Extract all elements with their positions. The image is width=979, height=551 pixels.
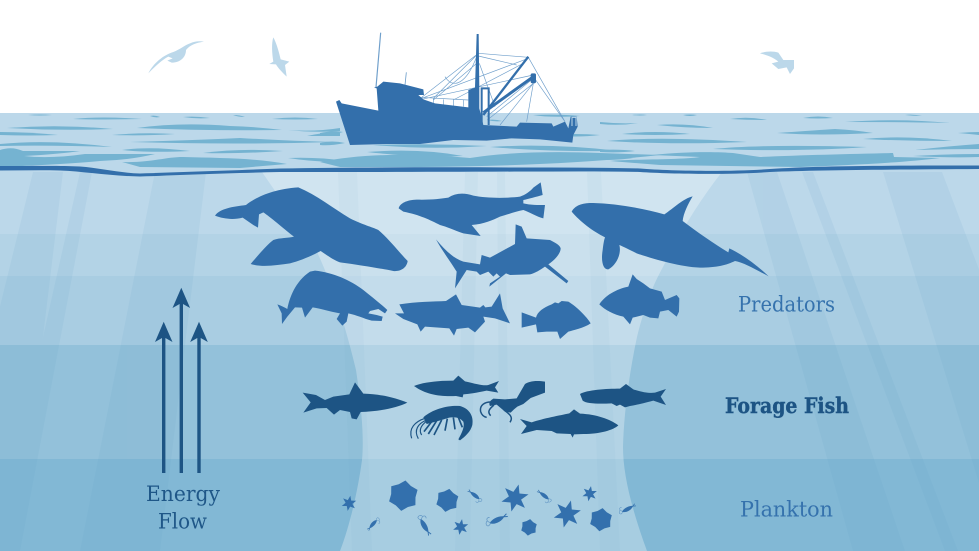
label: energy flow xyxy=(146,482,220,534)
icon: seal xyxy=(399,182,545,236)
arrow right xyxy=(190,322,208,473)
surface ripples xyxy=(0,114,979,168)
icon: seagull middle xyxy=(269,37,289,77)
sea surface xyxy=(0,113,979,176)
icon: billfish xyxy=(436,224,568,288)
fishing boat xyxy=(336,33,578,145)
icon: squid xyxy=(480,381,545,422)
icon: humpback whale xyxy=(215,187,408,271)
hull and cabin xyxy=(336,34,578,145)
label: plankton: Plankton xyxy=(740,498,833,522)
sunlit centre column xyxy=(262,172,722,551)
label: forage fish: Forage Fish xyxy=(725,393,849,418)
icon: salmon xyxy=(395,293,510,336)
icon: copepods xyxy=(366,489,636,536)
forage fish group xyxy=(303,376,666,440)
faint vertical rays in centre xyxy=(338,172,620,551)
icon: phytoplankton cells xyxy=(341,479,613,537)
icon: krill xyxy=(411,406,473,440)
label: predators: Predators xyxy=(738,292,835,316)
icon: forage fish lower xyxy=(520,409,618,438)
icon: seagull left xyxy=(148,41,204,73)
label: energy flow: Energy xyxy=(146,482,220,506)
label: energy flow: Flow xyxy=(158,510,207,534)
icon: seagull right xyxy=(760,51,794,74)
icon: forage fish top xyxy=(414,376,499,397)
icon: rockfish xyxy=(522,301,591,339)
icon: orca xyxy=(572,196,769,276)
icon: carp xyxy=(277,271,387,326)
icon: forage fish right xyxy=(580,384,666,407)
light rays xyxy=(8,172,979,276)
plankton group xyxy=(341,479,636,537)
arrow left xyxy=(155,322,172,473)
ocean depth bands xyxy=(0,172,979,551)
rigging xyxy=(376,33,565,125)
icon: forage fish left xyxy=(303,382,407,419)
energy flow arrows xyxy=(155,288,208,473)
predators group xyxy=(215,182,769,339)
icon: grouper xyxy=(599,274,679,324)
surface line xyxy=(0,166,979,176)
arrow centre xyxy=(172,288,190,473)
